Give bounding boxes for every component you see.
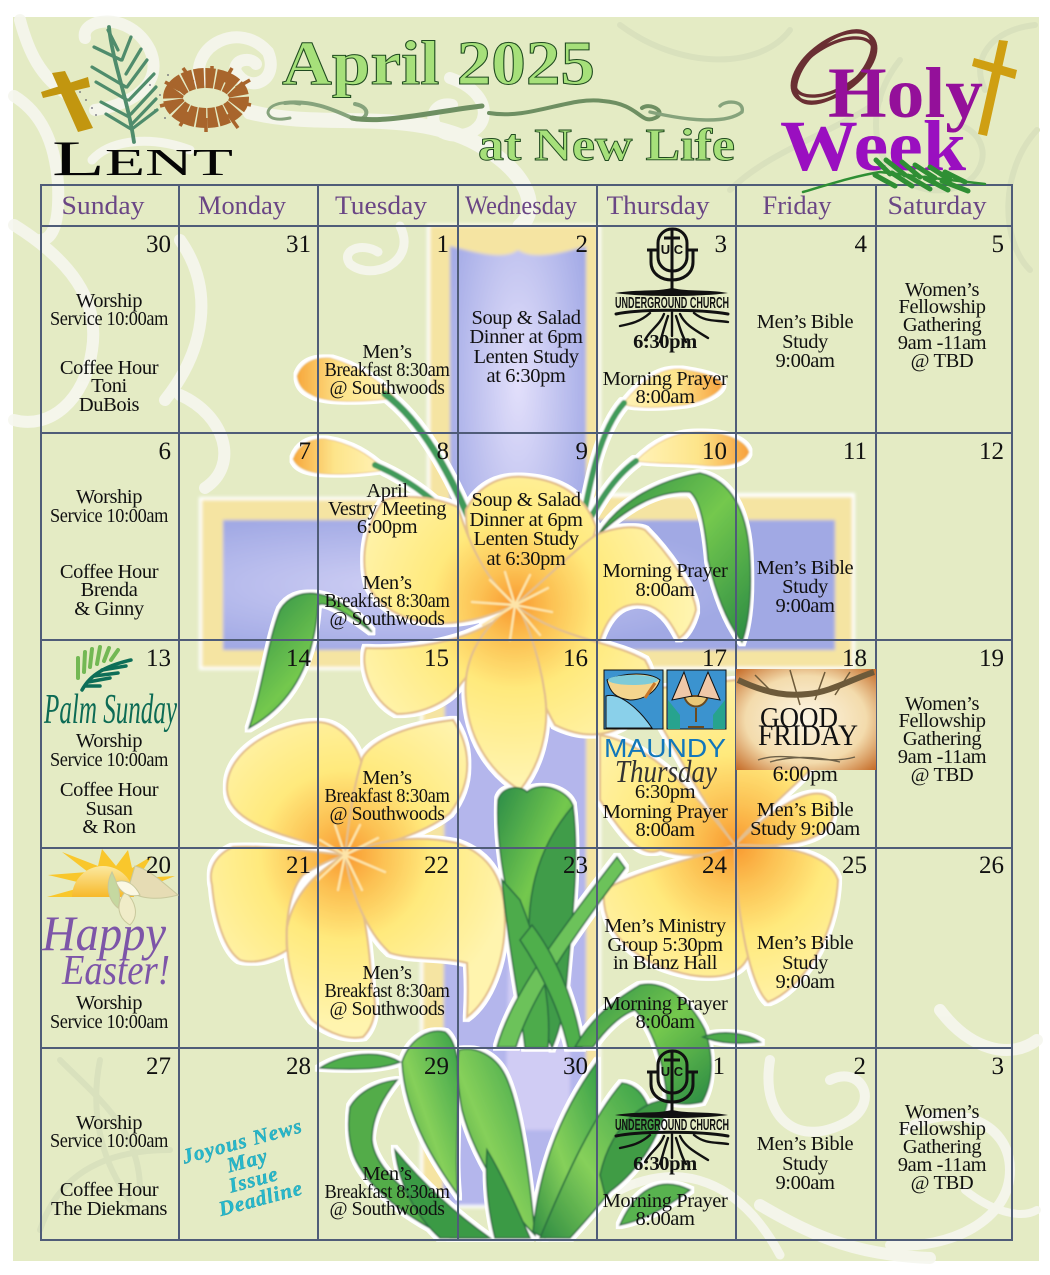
Sunday events: Toni bbox=[91, 375, 128, 397]
weekday header row: Thursday bbox=[606, 191, 710, 220]
Sunday events: Coffee Hour bbox=[60, 1179, 159, 1201]
Saturday events: Women’s bbox=[905, 693, 979, 715]
flower bud and stems bbox=[497, 787, 625, 1048]
Friday events: Study bbox=[782, 331, 829, 353]
date numbers: 4 bbox=[854, 231, 868, 258]
date numbers: 1 bbox=[712, 1053, 725, 1080]
icon: Palm Sunday bbox=[43, 647, 177, 733]
title bbox=[268, 30, 742, 170]
Tuesday events: April bbox=[366, 480, 408, 502]
date numbers: 30 bbox=[146, 231, 171, 258]
Friday events: Men’s Bible bbox=[757, 311, 853, 333]
Saturday events bbox=[898, 279, 987, 1194]
Thursday events: in Blanz Hall bbox=[613, 952, 718, 974]
date numbers: 2 bbox=[576, 231, 588, 258]
date numbers: 26 bbox=[979, 852, 1004, 879]
Sunday events: Brenda bbox=[81, 579, 138, 601]
Sunday events: Worship bbox=[76, 1112, 142, 1134]
Sunday events: Service 10:00am bbox=[50, 1130, 168, 1152]
palm branch bbox=[92, 27, 157, 142]
Tuesday events: Breakfast 8:30am bbox=[324, 980, 450, 1002]
date numbers: 19 bbox=[979, 645, 1004, 672]
icon: Maundy Thursday: MAUNDY bbox=[604, 733, 726, 763]
icon: Underground Church April 3: UNDERGROUND CHURCH bbox=[615, 295, 729, 312]
Saturday events: Gathering bbox=[903, 314, 981, 336]
cross behind the lily bbox=[199, 224, 855, 1208]
date numbers: 28 bbox=[286, 1053, 311, 1080]
date numbers: 7 bbox=[298, 438, 311, 465]
Thursday events: Men’s Ministry bbox=[604, 915, 727, 937]
Friday events: 9:00am bbox=[775, 971, 835, 993]
Friday events bbox=[750, 311, 860, 1194]
Thursday events: 8:00am bbox=[635, 1208, 695, 1230]
stamens bbox=[472, 572, 552, 640]
callout: Joyous News deadline: Joyous News bbox=[178, 1113, 305, 1169]
Wednesday events: Dinner at 6pm bbox=[469, 509, 583, 531]
date numbers: 10 bbox=[702, 438, 727, 465]
weekday header row: Sunday bbox=[62, 191, 144, 220]
Thursday events: 6:30pm bbox=[633, 1153, 697, 1175]
Thursday events: 6:30pm bbox=[635, 781, 696, 803]
chalice panel bbox=[667, 670, 726, 729]
date numbers: 31 bbox=[286, 231, 311, 258]
Thursday events: 8:00am bbox=[635, 1011, 695, 1033]
date numbers: 25 bbox=[842, 852, 867, 879]
Saturday events: 9am -11am bbox=[898, 746, 987, 768]
weekday header row: Wednesday bbox=[465, 191, 577, 220]
Friday events: Men’s Bible bbox=[757, 799, 853, 821]
weekday header row: Friday bbox=[762, 191, 832, 220]
Tuesday events: Men’s bbox=[362, 341, 412, 363]
calendar grid bbox=[41, 185, 1012, 1240]
icon: Good Friday image bbox=[736, 669, 876, 770]
stamens bbox=[318, 825, 385, 890]
buds bbox=[293, 358, 749, 474]
palm leaf bbox=[78, 647, 131, 690]
Saturday events: @ TBD bbox=[911, 764, 973, 786]
date numbers: 16 bbox=[563, 645, 588, 672]
Week word: Week bbox=[780, 106, 966, 186]
lily bbox=[108, 866, 178, 925]
Tuesday events: @ Southwoods bbox=[330, 803, 445, 825]
date numbers: 20 bbox=[146, 852, 171, 879]
Sunday events: Service 10:00am bbox=[50, 505, 168, 527]
date numbers: 15 bbox=[424, 645, 449, 672]
Tuesday events: Breakfast 8:30am bbox=[324, 590, 450, 612]
weekday header row: Monday bbox=[198, 191, 286, 220]
date numbers: 24 bbox=[702, 852, 728, 879]
gold cross bbox=[972, 40, 1017, 136]
icon: Happy Easter bbox=[41, 849, 178, 994]
Sunday events: Coffee Hour bbox=[60, 357, 159, 379]
Wednesday events: at 6:30pm bbox=[487, 365, 566, 387]
icon: Lent emblem bbox=[41, 27, 251, 186]
Thursday events bbox=[603, 331, 728, 1230]
date numbers: 12 bbox=[979, 438, 1004, 465]
weekday header row: Tuesday bbox=[335, 191, 427, 220]
Holy word: Holy bbox=[828, 53, 983, 133]
date numbers: 2 bbox=[854, 1053, 866, 1080]
Sunday events: Worship bbox=[76, 992, 142, 1014]
callout: Joyous News deadline: May bbox=[223, 1143, 271, 1178]
Saturday events: Gathering bbox=[903, 1136, 981, 1158]
date numbers: 9 bbox=[576, 438, 588, 465]
callout: Joyous News deadline bbox=[178, 1113, 321, 1227]
Friday events: Men’s Bible bbox=[757, 1133, 853, 1155]
Tuesday events: @ Southwoods bbox=[330, 998, 445, 1020]
Thursday events: Group 5:30pm bbox=[607, 934, 723, 956]
Thursday events: 6:30pm bbox=[633, 331, 697, 353]
Saturday events: Fellowship bbox=[898, 1118, 986, 1140]
date numbers: 18 bbox=[842, 645, 867, 672]
Saturday events: Gathering bbox=[903, 728, 981, 750]
Lent wordmark: L ENT bbox=[52, 130, 233, 186]
Wednesday events: Soup & Salad bbox=[471, 307, 581, 329]
Sunday events: Coffee Hour bbox=[60, 561, 159, 583]
Sunday events: & Ron bbox=[82, 816, 136, 838]
date numbers: 21 bbox=[286, 852, 311, 879]
Sunday events: DuBois bbox=[79, 394, 140, 416]
Friday events: Men’s Bible bbox=[757, 932, 853, 954]
icon: Underground Church April 3: U C bbox=[661, 242, 684, 257]
date numbers: 8 bbox=[436, 438, 449, 465]
Friday events: Study bbox=[782, 952, 829, 974]
Tuesday events: Men’s bbox=[362, 572, 412, 594]
Tuesday events: @ Southwoods bbox=[330, 1198, 445, 1220]
date numbers: 29 bbox=[424, 1053, 449, 1080]
Tuesday events: 6:00pm bbox=[357, 516, 418, 538]
weekday header row: Saturday bbox=[888, 191, 986, 220]
center flower bbox=[364, 477, 696, 790]
Happy word: Happy bbox=[41, 905, 167, 961]
date numbers: 3 bbox=[714, 231, 727, 258]
date numbers: 14 bbox=[286, 645, 312, 672]
lower left flower bbox=[211, 720, 505, 1038]
icon: Underground Church May 1 bbox=[615, 1051, 729, 1164]
April 2025 heading: April 2025 bbox=[282, 30, 595, 98]
bud stems bbox=[375, 394, 636, 550]
Thursday events: Morning Prayer bbox=[603, 560, 728, 582]
Wednesday events: at 6:30pm bbox=[487, 548, 566, 570]
icon: Good Friday image: GOOD bbox=[760, 702, 838, 734]
Sunday events: Worship bbox=[76, 486, 142, 508]
Sunday events: Coffee Hour bbox=[60, 779, 159, 801]
icon: Underground Church May 1: U C bbox=[661, 1064, 684, 1079]
date numbers: 27 bbox=[146, 1053, 171, 1080]
Tuesday events: Breakfast 8:30am bbox=[324, 785, 450, 807]
Saturday events: 9am -11am bbox=[898, 332, 987, 354]
Thursday events: Morning Prayer bbox=[603, 993, 728, 1015]
Friday events: Study 9:00am bbox=[750, 818, 860, 840]
Easter word: Easter! bbox=[61, 948, 170, 994]
Tuesday events: Breakfast 8:30am bbox=[324, 359, 450, 381]
Friday events: 9:00am bbox=[775, 1172, 835, 1194]
Sunday events: Susan bbox=[86, 798, 133, 820]
date numbers: 17 bbox=[702, 645, 727, 672]
icon: Palm Sunday: Palm Sunday bbox=[43, 687, 177, 733]
Friday events: 9:00am bbox=[775, 350, 835, 372]
Sunday events: & Ginny bbox=[74, 598, 145, 620]
date numbers bbox=[146, 231, 1004, 1080]
Tuesday events: Breakfast 8:30am bbox=[324, 1181, 450, 1203]
Saturday events: Women’s bbox=[905, 1101, 979, 1123]
icon: Maundy Thursday: Thursday bbox=[615, 753, 718, 789]
flourish bbox=[268, 100, 742, 120]
Tuesday events: Men’s bbox=[362, 767, 412, 789]
Wednesday events bbox=[469, 307, 583, 570]
Wednesday events: Soup & Salad bbox=[471, 489, 581, 511]
Saturday events: @ TBD bbox=[911, 350, 973, 372]
crown of thorns bbox=[160, 66, 251, 132]
right flower bbox=[600, 680, 838, 1002]
callout: Joyous News deadline: Issue bbox=[225, 1161, 281, 1198]
Thursday events: 8:00am bbox=[635, 579, 695, 601]
date numbers: 22 bbox=[424, 852, 449, 879]
Wednesday events: Lenten Study bbox=[473, 528, 580, 550]
Sunday events: Worship bbox=[76, 730, 142, 752]
Sunday events: Worship bbox=[76, 290, 142, 312]
callout: Joyous News deadline: Deadline bbox=[215, 1175, 305, 1221]
icon: Underground Church May 1: UNDERGROUND CHURCH bbox=[615, 1117, 729, 1134]
Friday events: Men’s Bible bbox=[757, 557, 853, 579]
date numbers: 5 bbox=[992, 231, 1004, 258]
icon: Maundy Thursday bbox=[604, 670, 726, 789]
Sunday events bbox=[50, 290, 168, 1220]
palm frond bbox=[803, 160, 985, 192]
Tuesday events: @ Southwoods bbox=[330, 377, 445, 399]
Thursday events: 8:00am bbox=[635, 386, 695, 408]
Friday events: 9:00am bbox=[775, 595, 835, 617]
Sunday events: The Diekmans bbox=[51, 1198, 167, 1220]
Sunday events: Service 10:00am bbox=[50, 308, 168, 330]
bottom leaves bbox=[320, 984, 760, 1238]
Tuesday events: @ Southwoods bbox=[330, 608, 445, 630]
upper leaves bbox=[249, 473, 751, 728]
date numbers: 30 bbox=[563, 1053, 588, 1080]
Saturday events: 9am -11am bbox=[898, 1154, 987, 1176]
date numbers: 1 bbox=[436, 231, 449, 258]
Friday events: Study bbox=[782, 1153, 829, 1175]
Saturday events: Fellowship bbox=[898, 710, 986, 732]
Tuesday events: Men’s bbox=[362, 962, 412, 984]
date numbers: 6 bbox=[158, 438, 171, 465]
Friday events: Study bbox=[782, 576, 829, 598]
icon: Underground Church April 3 bbox=[615, 229, 729, 342]
Wednesday events: Lenten Study bbox=[473, 346, 580, 368]
Wednesday events: Dinner at 6pm bbox=[469, 326, 583, 348]
speckle dots bbox=[79, 74, 169, 119]
sun bbox=[47, 849, 175, 897]
icon: Good Friday image: FRIDAY bbox=[758, 719, 858, 752]
Saturday events: Fellowship bbox=[898, 296, 986, 318]
gold cross bbox=[41, 71, 93, 132]
weekday header row bbox=[62, 191, 986, 220]
icon: Holy Week emblem bbox=[780, 18, 1017, 192]
Friday events: 6:00pm bbox=[773, 761, 838, 786]
Saturday events: Women’s bbox=[905, 279, 979, 301]
date numbers: 11 bbox=[843, 438, 867, 465]
lily illustration bbox=[211, 358, 838, 1238]
crown of thorns bbox=[780, 18, 888, 116]
date numbers: 13 bbox=[146, 645, 171, 672]
Sunday events: Service 10:00am bbox=[50, 1011, 168, 1033]
Tuesday events bbox=[324, 341, 450, 1220]
Thursday events: 8:00am bbox=[635, 819, 695, 841]
at New Life subheading: at New Life bbox=[478, 119, 735, 170]
Thursday events: Morning Prayer bbox=[603, 1190, 728, 1212]
Tuesday events: Men’s bbox=[362, 1163, 412, 1185]
Saturday events: @ TBD bbox=[911, 1172, 973, 1194]
Thursday events: Morning Prayer bbox=[603, 368, 728, 390]
Tuesday events: Vestry Meeting bbox=[328, 498, 446, 520]
date numbers: 23 bbox=[563, 852, 588, 879]
date numbers: 3 bbox=[992, 1053, 1004, 1080]
Sunday events: Service 10:00am bbox=[50, 749, 168, 771]
Thursday events: Morning Prayer bbox=[603, 801, 728, 823]
foot washing panel bbox=[604, 670, 663, 729]
